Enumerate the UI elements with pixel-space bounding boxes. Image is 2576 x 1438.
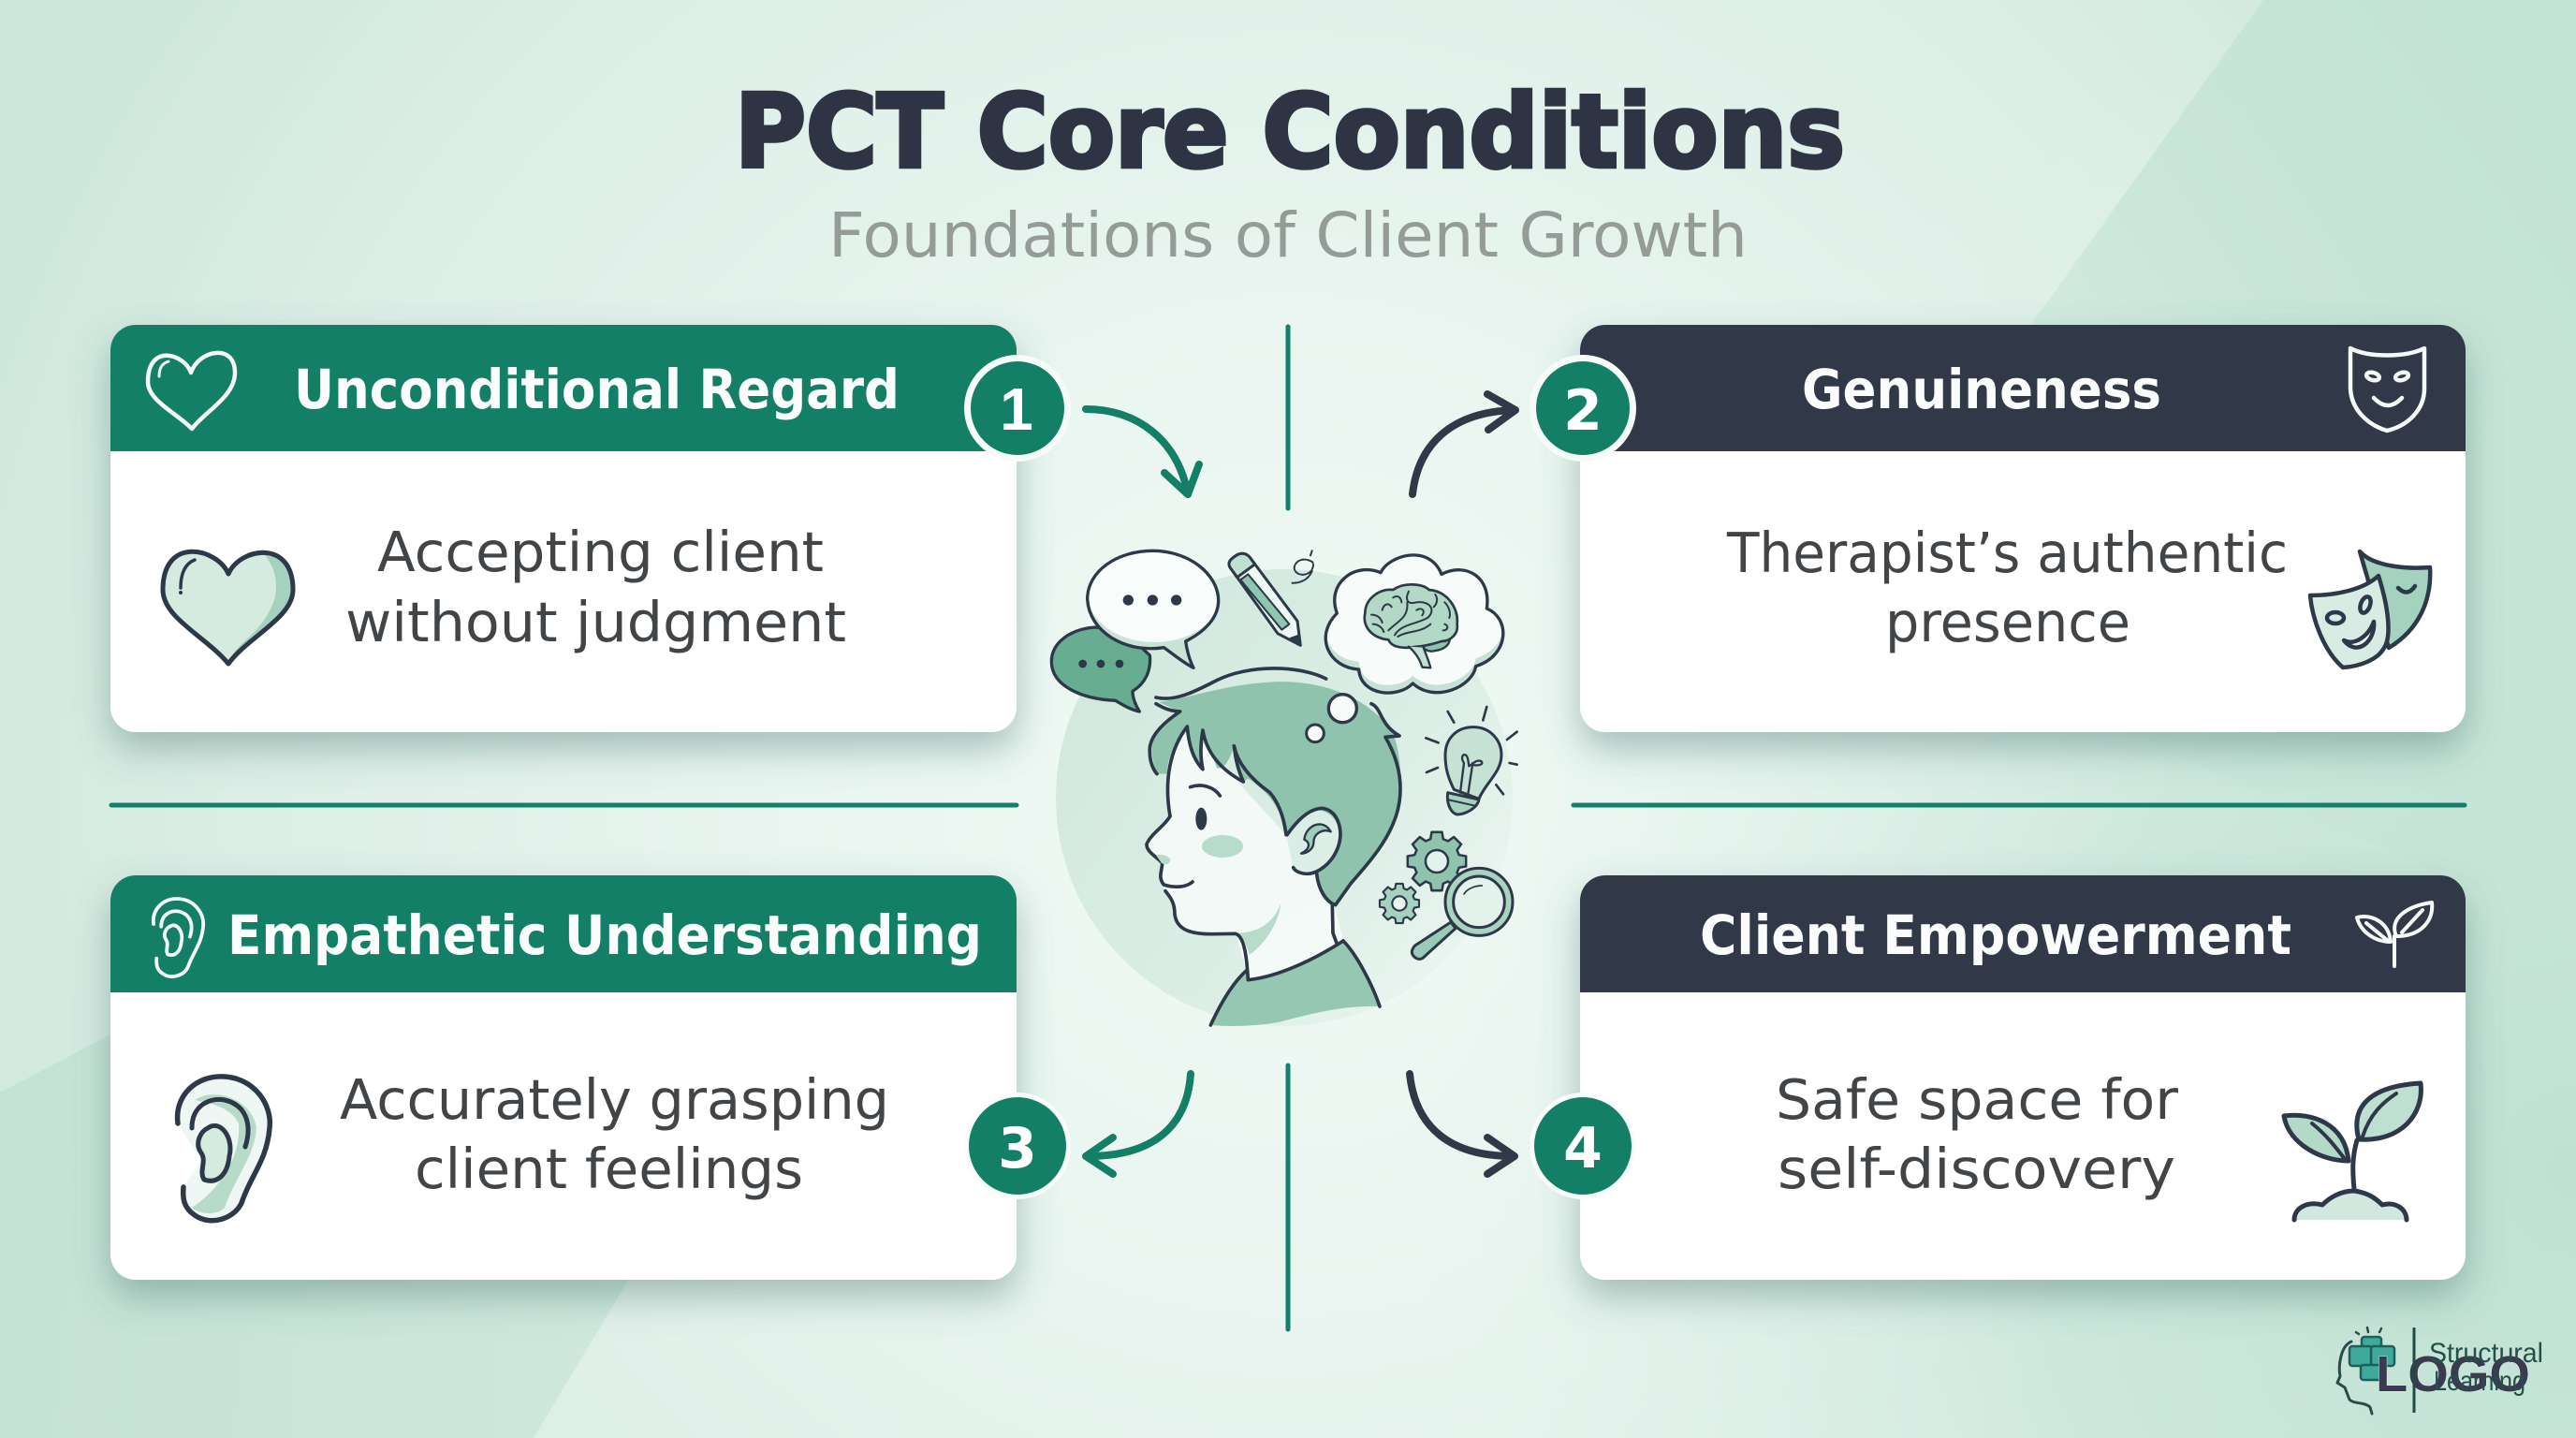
card 1 description [345, 520, 846, 654]
arrow 4 [1410, 1074, 1515, 1174]
arrow 3 [1086, 1074, 1191, 1174]
icon: pencil [1229, 553, 1300, 645]
icon: brain [1365, 584, 1457, 668]
card 2 description [1726, 521, 2288, 654]
badge 4: 4 [1563, 1116, 1603, 1181]
logo rays [2356, 1328, 2381, 1334]
logo [2337, 1328, 2543, 1414]
icon: large ear [178, 1077, 270, 1221]
shirt [1210, 941, 1380, 1026]
hair [1152, 682, 1400, 905]
central illustration [1051, 548, 1517, 1026]
panel: unconditional regard [110, 325, 1017, 732]
card 3 description: Accurately grasping [340, 1067, 889, 1132]
icon: big gear [1408, 832, 1466, 890]
card 1 description: without judgment [345, 590, 846, 654]
neck [1236, 899, 1343, 980]
panel: client empowerment [1580, 875, 2466, 1280]
panel: empathetic understanding [110, 875, 1017, 1280]
logo structural: Structural [2429, 1338, 2543, 1369]
card 2 header bar [1580, 325, 2466, 451]
card 2 description: presence [1885, 590, 2130, 654]
card 2 heading: Genuineness [1802, 358, 2161, 421]
card 4 description [1776, 1067, 2179, 1201]
badge 1 [964, 355, 1071, 462]
icon: lightbulb [1426, 707, 1517, 814]
badge 3: 3 [998, 1116, 1037, 1181]
badge 3 [964, 1093, 1071, 1199]
logo blocks [2349, 1337, 2394, 1380]
card 3 description: client feelings [415, 1137, 803, 1201]
icon: magnifier [1412, 868, 1513, 959]
icon: white speech bubble [1088, 549, 1221, 668]
thought bubbles [1328, 695, 1356, 723]
card 1 heading: Unconditional Regard [294, 358, 900, 421]
card 3 header bar [110, 875, 1017, 992]
divider lines [111, 327, 2465, 1329]
logo divider [2413, 1328, 2415, 1413]
card 3 description [340, 1067, 889, 1201]
badge 2: 2 [1563, 378, 1603, 444]
badge 2 [1530, 355, 1636, 462]
illustration top: bubbles, pencil, cloud [1051, 548, 1503, 712]
icon: header heart [148, 353, 235, 429]
card 3 heading: Empathetic Understanding [227, 903, 982, 967]
icon: theatre masks [2310, 551, 2430, 668]
logo head outline [2337, 1342, 2372, 1414]
icon: doodle [1291, 550, 1313, 583]
icon: large heart [163, 551, 293, 664]
logo learning: Learning [2434, 1366, 2525, 1397]
nose shade [1156, 855, 1170, 864]
illustration lower: head and icons [1147, 668, 1517, 1026]
panel: genuineness [1580, 325, 2466, 732]
card 4 header bar [1580, 875, 2466, 992]
head outline [1147, 668, 1400, 1025]
ear inner [1301, 824, 1331, 854]
cheek [1202, 835, 1243, 858]
card 2 description: Therapist’s authentic [1726, 521, 2288, 585]
icon: small gear [1380, 884, 1419, 923]
subtitle: Foundations of Client Growth [828, 199, 1748, 271]
icon: header ear [154, 899, 203, 976]
card 4 heading: Client Empowerment [1700, 903, 2291, 967]
arrow 2 [1412, 394, 1515, 494]
logo word: LOGO [2376, 1346, 2530, 1402]
icon: green speech bubble [1051, 627, 1150, 712]
chin shadow [1237, 903, 1281, 955]
icon: thought cloud [1325, 548, 1503, 693]
title: PCT Core Conditions [735, 74, 1845, 191]
icon: header mask [2350, 348, 2424, 431]
icon: header sprout [2357, 902, 2432, 966]
badge 1: 1 [1000, 375, 1033, 443]
eye [1195, 808, 1207, 830]
card 1 description: Accepting client [377, 520, 824, 584]
icon: large sprout [2284, 1083, 2421, 1220]
card 4 description: Safe space for [1776, 1067, 2179, 1132]
card 1 header bar [110, 325, 1017, 451]
card 4 description: self-discovery [1778, 1137, 2175, 1201]
face [1147, 727, 1323, 934]
arrow 1 [1086, 409, 1199, 494]
badge 4 [1530, 1093, 1636, 1199]
center circle [1056, 569, 1513, 1026]
